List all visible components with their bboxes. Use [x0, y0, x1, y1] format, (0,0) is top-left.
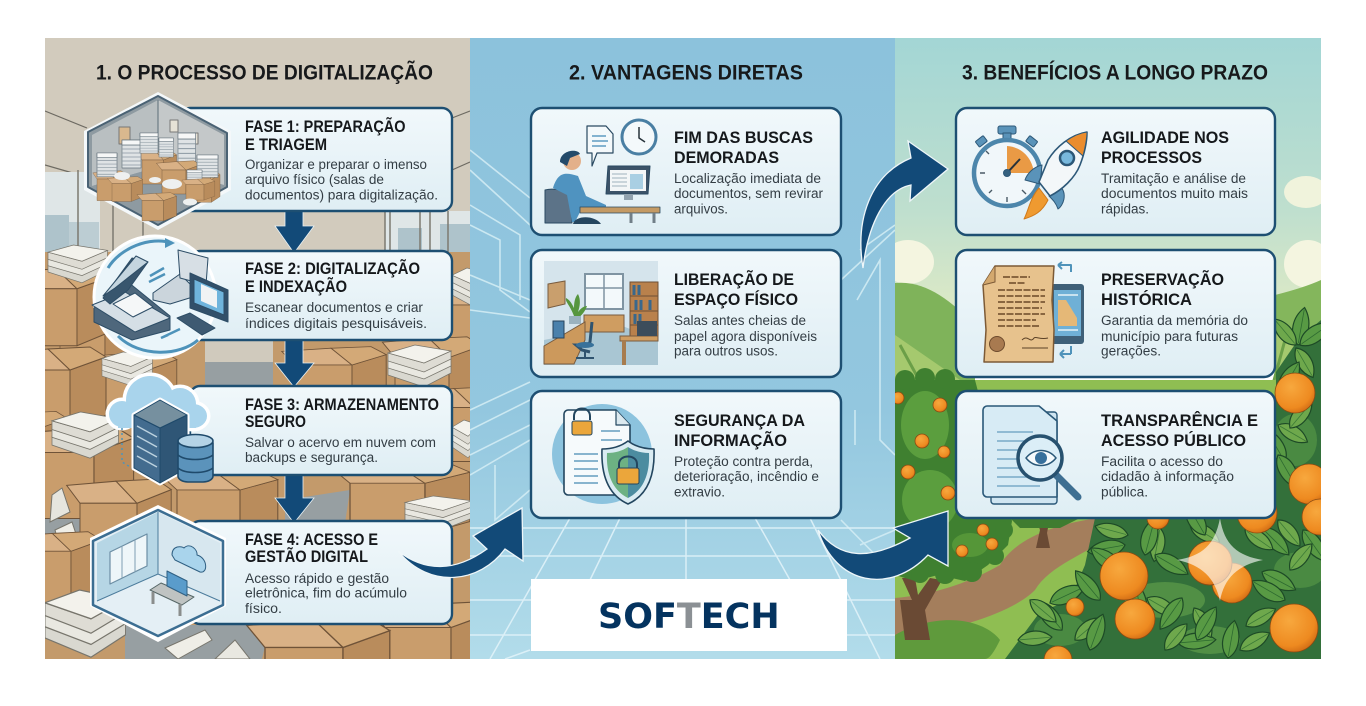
icon: cloud server — [109, 376, 213, 483]
card: fase 4 — [190, 521, 452, 624]
text: fim das buscas: DEMORADAS — [674, 149, 779, 167]
card: fim das buscas — [531, 108, 841, 235]
text: preservação: gerações. — [1101, 344, 1161, 358]
text: agilidade: documentos muito mais — [1101, 186, 1248, 201]
card: segurança — [531, 391, 841, 518]
text: transparência — [1101, 411, 1258, 500]
text: fase 3: FASE 3: ARMAZENAMENTO — [245, 396, 439, 414]
panel: advantages background — [470, 38, 895, 659]
text: agilidade: PROCESSOS — [1101, 149, 1202, 167]
icon: parchment and tablet — [983, 262, 1084, 362]
text: liberação — [674, 269, 817, 358]
card: preservação — [956, 250, 1275, 377]
card: fase 2 — [190, 251, 452, 340]
text: fim das buscas: documentos, sem revirar — [674, 186, 824, 201]
icon: person at computer — [545, 120, 660, 224]
text: preservação: HISTÓRICA — [1101, 290, 1192, 309]
cardboard boxes and paper piles — [45, 244, 470, 659]
logo: softech: SOFTECH — [598, 597, 780, 637]
icon: scanner and computer — [92, 236, 228, 358]
sparkle watermark — [1177, 518, 1263, 601]
text: fase 4: FASE 4: ACESSO E — [245, 531, 378, 549]
text: segurança: Proteção contra perda, — [674, 454, 813, 469]
text: transparência: Facilita o acesso do — [1101, 454, 1223, 469]
icon: archive room — [84, 92, 231, 230]
text: segurança: extravio. — [674, 484, 725, 500]
arrow: phase 2 to 3 — [275, 338, 314, 387]
right orange tree foliage — [1005, 306, 1335, 659]
text: liberação: LIBERAÇÃO DE — [674, 269, 794, 289]
text: fase 1: arquivo físico (salas de — [245, 172, 384, 187]
text: fase 2: índices digitais pesquisáveis. — [245, 316, 427, 331]
arrow: phase 3 to 4 — [275, 473, 314, 523]
text: fase 3: backups e segurança. — [245, 450, 378, 465]
text: fase 3: SEGURO — [245, 413, 306, 431]
card: transparência — [956, 391, 1275, 518]
card: liberação de espaço — [531, 250, 841, 377]
text: fase 4: GESTÃO DIGITAL — [245, 546, 368, 566]
text: fase 3 — [245, 396, 439, 465]
text: liberação: papel agora disponíveis — [674, 329, 817, 344]
text: transparência: ACESSO PÚBLICO — [1101, 431, 1246, 450]
icon: digital office room — [90, 505, 226, 642]
text: agilidade: AGILIDADE NOS — [1101, 129, 1229, 147]
icon: document and shield — [552, 404, 654, 504]
icon: stopwatch and rocket — [974, 126, 1087, 219]
text: transparência: cidadão à informação — [1101, 469, 1234, 484]
text: fase 1: documentos) para digitalização. — [245, 188, 438, 202]
text: fase 4: físico. — [245, 601, 282, 616]
text: liberação: Salas antes cheias de — [674, 313, 806, 328]
card: fase 3 — [190, 386, 452, 475]
logo: softech — [531, 579, 847, 651]
text: segurança: INFORMAÇÃO — [674, 430, 787, 450]
text: fase 2: E INDEXAÇÃO — [245, 276, 347, 296]
text: fase 4: eletrônica, fim do acúmulo — [245, 586, 407, 600]
oranges — [892, 373, 1338, 674]
heading: benefits: 3. BENEFÍCIOS A LONGO PRAZO — [962, 62, 1268, 84]
card: fase 1 — [180, 108, 452, 211]
text: fase 2: Escanear documentos e criar — [245, 300, 424, 315]
text: fase 3: Salvar o acervo em nuvem com — [245, 435, 436, 450]
text: fase 2 — [245, 258, 427, 331]
text: transparência: TRANSPARÊNCIA E — [1101, 411, 1258, 430]
arrow: phase 1 to 2 — [275, 209, 314, 253]
text: transparência: pública. — [1101, 484, 1148, 500]
text: preservação: PRESERVAÇÃO — [1101, 269, 1224, 289]
text: preservação: Garantia da memória do — [1101, 313, 1248, 328]
text: fase 1: E TRIAGEM — [245, 136, 327, 154]
text: fase 1 — [245, 116, 438, 202]
text: liberação: para outros usos. — [674, 344, 778, 358]
left orange tree — [895, 368, 1013, 640]
heading: advantages: 2. VANTAGENS DIRETAS — [569, 62, 803, 84]
text: segurança — [674, 412, 819, 500]
arrow: process to advantages — [398, 508, 523, 577]
text: segurança: SEGURANÇA DA — [674, 412, 805, 430]
text: fase 2: FASE 2: DIGITALIZAÇÃO — [245, 258, 420, 278]
text: segurança: deterioração, incêndio e — [674, 469, 819, 484]
panel: process background — [45, 38, 470, 659]
text: agilidade — [1101, 129, 1248, 216]
text: fase 4: Acesso rápido e gestão — [245, 571, 389, 586]
heading: process: 1. O PROCESSO DE DIGITALIZAÇÃO — [96, 62, 433, 84]
card: agilidade — [956, 108, 1275, 235]
arrow: advantages down to benefits — [818, 511, 948, 579]
panel: benefits background — [882, 38, 1332, 659]
text: fim das buscas: FIM DAS BUSCAS — [674, 129, 813, 147]
text: preservação — [1101, 269, 1248, 358]
arrow: advantages up to benefits — [861, 141, 948, 268]
text: agilidade: Tramitação e análise de — [1101, 171, 1246, 186]
text: fase 1: Organizar e preparar o imenso — [245, 157, 427, 172]
icon: document with magnifier — [983, 406, 1078, 504]
text: fase 1: FASE 1: PREPARAÇÃO — [245, 116, 406, 136]
text: preservação: município para futuras — [1101, 329, 1238, 344]
text: fim das buscas: arquivos. — [674, 202, 728, 216]
text: fase 4 — [245, 531, 407, 616]
text: fim das buscas: Localização imediata de — [674, 171, 821, 186]
text: liberação: ESPAÇO FÍSICO — [674, 290, 798, 309]
icon: tidy office — [544, 261, 658, 365]
text: fim das buscas — [674, 129, 824, 216]
text: agilidade: rápidas. — [1101, 202, 1149, 216]
